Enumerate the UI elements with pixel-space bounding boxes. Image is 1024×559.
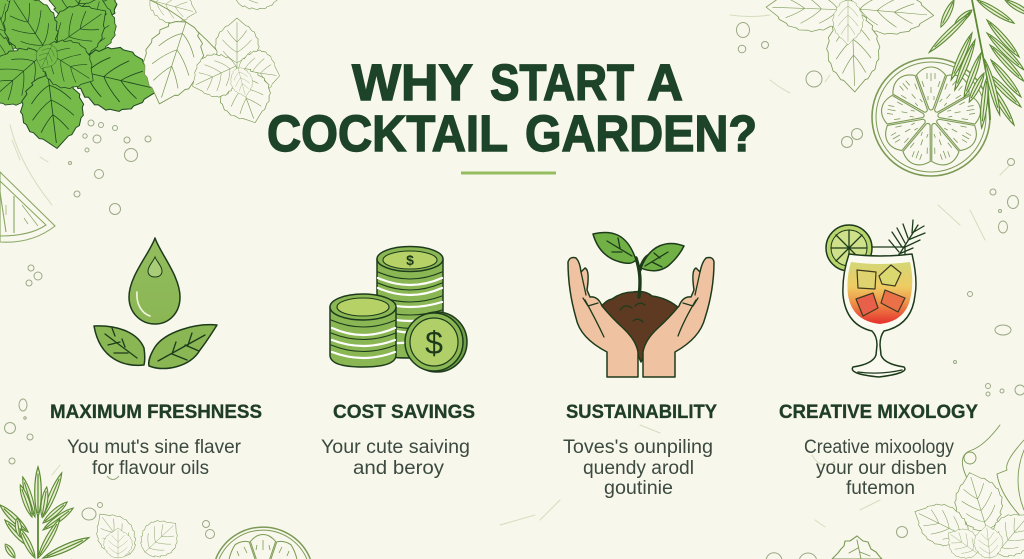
leaf lines right edge: [962, 425, 1024, 520]
column: sustainability: [563, 401, 717, 499]
title: WHY: [352, 54, 473, 111]
column: creative mixology: CREATIVE MIXOLOGY: [779, 401, 978, 423]
column: cost savings: [321, 401, 475, 479]
bubbles top left: [68, 120, 151, 214]
column: creative mixology: [779, 401, 978, 499]
icon: coin stacks: $: [425, 325, 443, 361]
outline mint bottom right: [832, 466, 1024, 559]
column: cost savings: Your cute saiving: [321, 437, 470, 458]
column: cost savings: COST SAVINGS: [333, 401, 475, 423]
column: maximum freshness: You mut's sine flaver: [67, 437, 242, 458]
column: sustainability: SUSTAINABILITY: [566, 401, 717, 423]
icon: coin stacks: [330, 246, 467, 372]
title: [267, 54, 757, 162]
green mint cluster: [0, 0, 167, 152]
lime slice bottom: [216, 527, 310, 559]
title underline: [461, 172, 556, 174]
rosemary bottom left: [0, 467, 90, 559]
title: COCKTAIL: [267, 105, 508, 162]
rosemary top right: [927, 0, 1024, 128]
column: maximum freshness: MAXIMUM FRESHNESS: [50, 401, 262, 423]
column: sustainability: Toves's ounpiling: [563, 437, 713, 458]
icon: cocktail glass: [826, 220, 925, 377]
column: creative mixology: Creative mixoology: [804, 437, 954, 458]
bubbles top right: [736, 22, 1024, 396]
column: creative mixology: your our disben: [816, 458, 947, 479]
icon: coin stacks: $: [406, 252, 414, 268]
lime slice top right: [872, 58, 990, 176]
column: maximum freshness: for flavour oils: [92, 458, 209, 479]
column: sustainability: goutinie: [604, 478, 673, 499]
column: creative mixology: futemon: [846, 478, 915, 499]
outline mint top right: [765, 0, 936, 93]
outline mint bottom left: [82, 502, 188, 559]
bubbles bottom centre: [202, 520, 908, 559]
outline mint sprig top: [131, 0, 294, 131]
title: GARDEN?: [525, 105, 757, 162]
title: A: [647, 54, 683, 111]
column: sustainability: quendy arodl: [583, 458, 694, 479]
lime wedge left: [0, 172, 55, 242]
bubbles left: [4, 265, 119, 480]
title: START: [490, 54, 634, 111]
column: maximum freshness: [50, 401, 262, 479]
column: cost savings: and beroy: [353, 458, 445, 479]
icon: droplet and leaves: [94, 238, 217, 368]
icon: hands holding seedling: [568, 232, 714, 377]
